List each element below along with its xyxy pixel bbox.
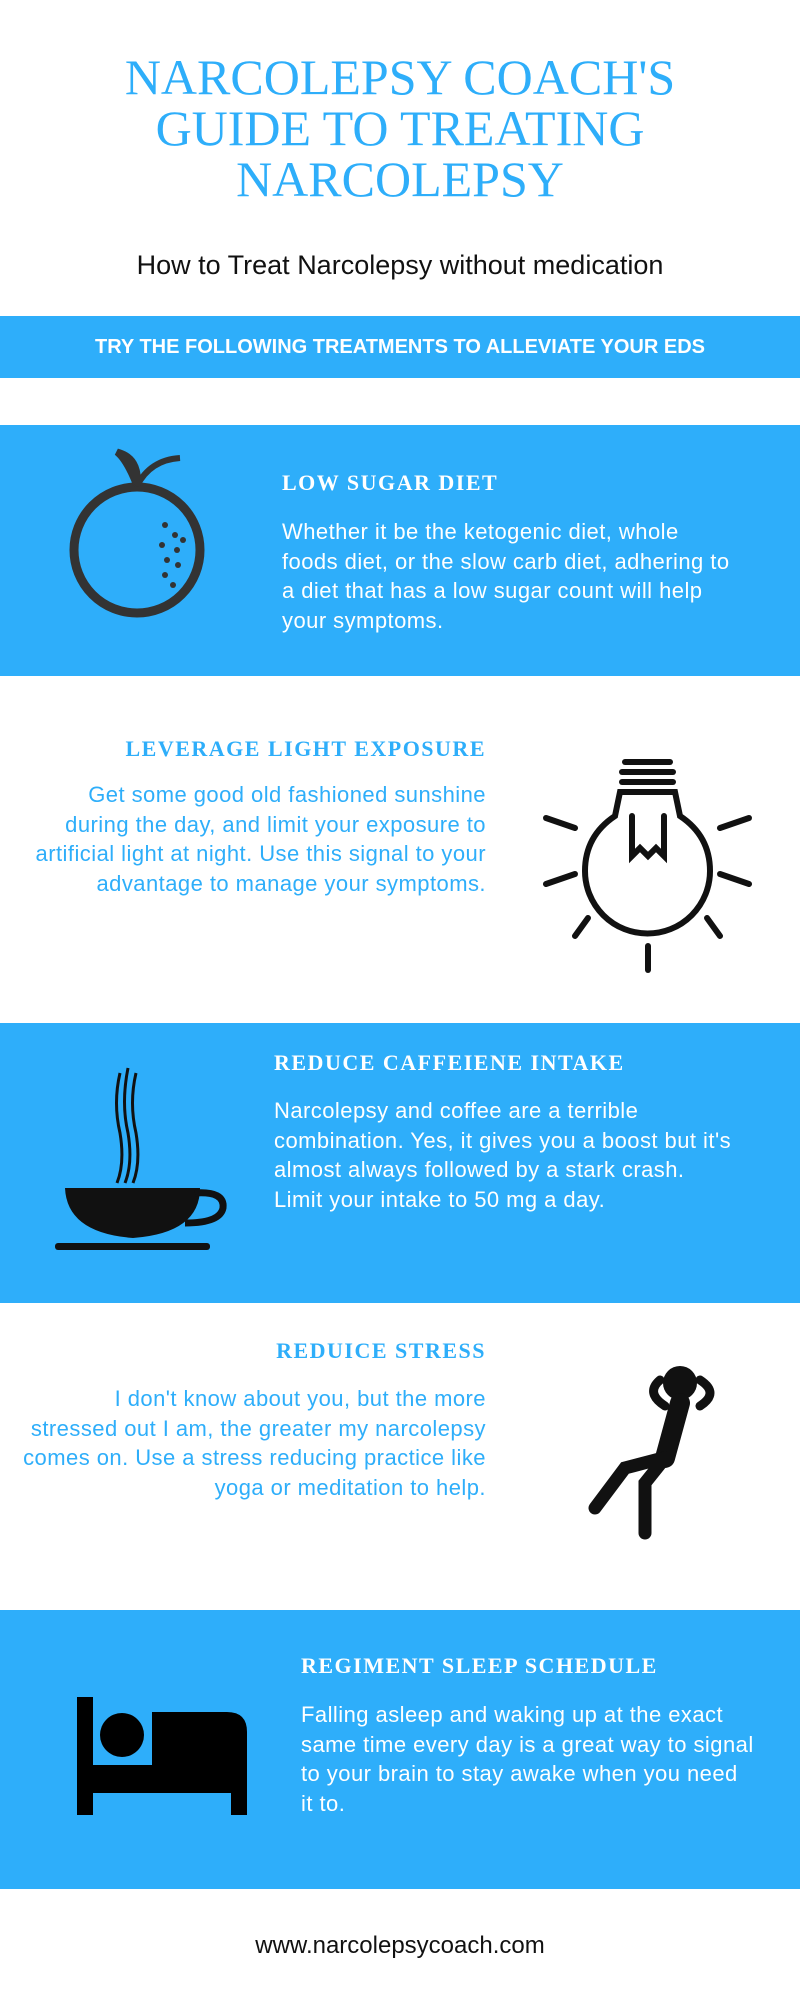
icon: orange bbox=[70, 448, 204, 618]
footer url: www.narcolepsycoach.com bbox=[255, 1932, 545, 1959]
body text: yoga or meditation to help. bbox=[215, 1474, 486, 1500]
body text: almost always followed by a stark crash. bbox=[274, 1157, 684, 1182]
heading: LEVERAGE LIGHT EXPOSURE bbox=[125, 736, 486, 761]
body text: comes on. Use a stress reducing practice like bbox=[23, 1445, 486, 1470]
icon: light bulb bbox=[542, 759, 752, 973]
subtitle: How to Treat Narcolepsy without medication bbox=[137, 250, 663, 280]
body text bbox=[36, 782, 486, 896]
body text: advantage to manage your symptoms. bbox=[96, 870, 486, 896]
body text: Falling asleep and waking up at the exact bbox=[301, 1702, 723, 1727]
body text bbox=[23, 1386, 486, 1500]
title: NARCOLEPSY bbox=[236, 151, 564, 207]
body text: your symptoms. bbox=[282, 608, 444, 632]
body text bbox=[301, 1702, 754, 1816]
body text: Get some good old fashioned sunshine bbox=[88, 782, 486, 807]
body text: combination. Yes, it gives you a boost but it's bbox=[274, 1128, 731, 1152]
body text: Whether it be the ketogenic diet, whole bbox=[282, 519, 679, 544]
panel: low sugar diet bbox=[0, 425, 800, 676]
body text: Narcolepsy and coffee are a terrible bbox=[274, 1098, 638, 1123]
body text: during the day, and limit your exposure to bbox=[65, 812, 486, 836]
body text: stressed out I am, the greater my narcolepsy bbox=[31, 1416, 486, 1440]
title: GUIDE TO TREATING bbox=[156, 100, 644, 156]
heading: REGIMENT SLEEP SCHEDULE bbox=[301, 1653, 658, 1678]
panel: sleep schedule bbox=[0, 1610, 800, 1889]
panel: reduce caffeine bbox=[0, 1023, 800, 1303]
body text: I don't know about you, but the more bbox=[115, 1386, 486, 1411]
title: NARCOLEPSY COACH'S bbox=[125, 49, 675, 105]
heading: LOW SUGAR DIET bbox=[282, 470, 498, 495]
banner bbox=[0, 316, 800, 378]
body text: Limit your intake to 50 mg a day. bbox=[274, 1186, 605, 1212]
icon: relaxing person bbox=[588, 1366, 714, 1540]
banner: TRY THE FOLLOWING TREATMENTS TO ALLEVIATE YOUR EDS bbox=[95, 336, 705, 358]
icon: coffee cup bbox=[55, 1068, 227, 1250]
heading: REDUCE CAFFEIENE INTAKE bbox=[274, 1050, 625, 1075]
title bbox=[125, 49, 675, 207]
heading: REDUICE STRESS bbox=[276, 1338, 486, 1363]
panel: light exposure bbox=[36, 736, 752, 973]
body text: it to. bbox=[301, 1790, 345, 1816]
panel: reduce stress bbox=[23, 1338, 714, 1540]
body text: a diet that has a low sugar count will help bbox=[282, 578, 702, 603]
body text: same time every day is a great way to signal bbox=[301, 1732, 754, 1756]
body text bbox=[274, 1098, 731, 1212]
body text bbox=[282, 519, 730, 632]
body text: artificial light at night. Use this signal to your bbox=[36, 841, 486, 866]
icon: bed bbox=[77, 1697, 247, 1815]
body text: foods diet, or the slow carb diet, adhering to bbox=[282, 548, 730, 574]
body text: to your brain to stay awake when you need bbox=[301, 1761, 738, 1786]
